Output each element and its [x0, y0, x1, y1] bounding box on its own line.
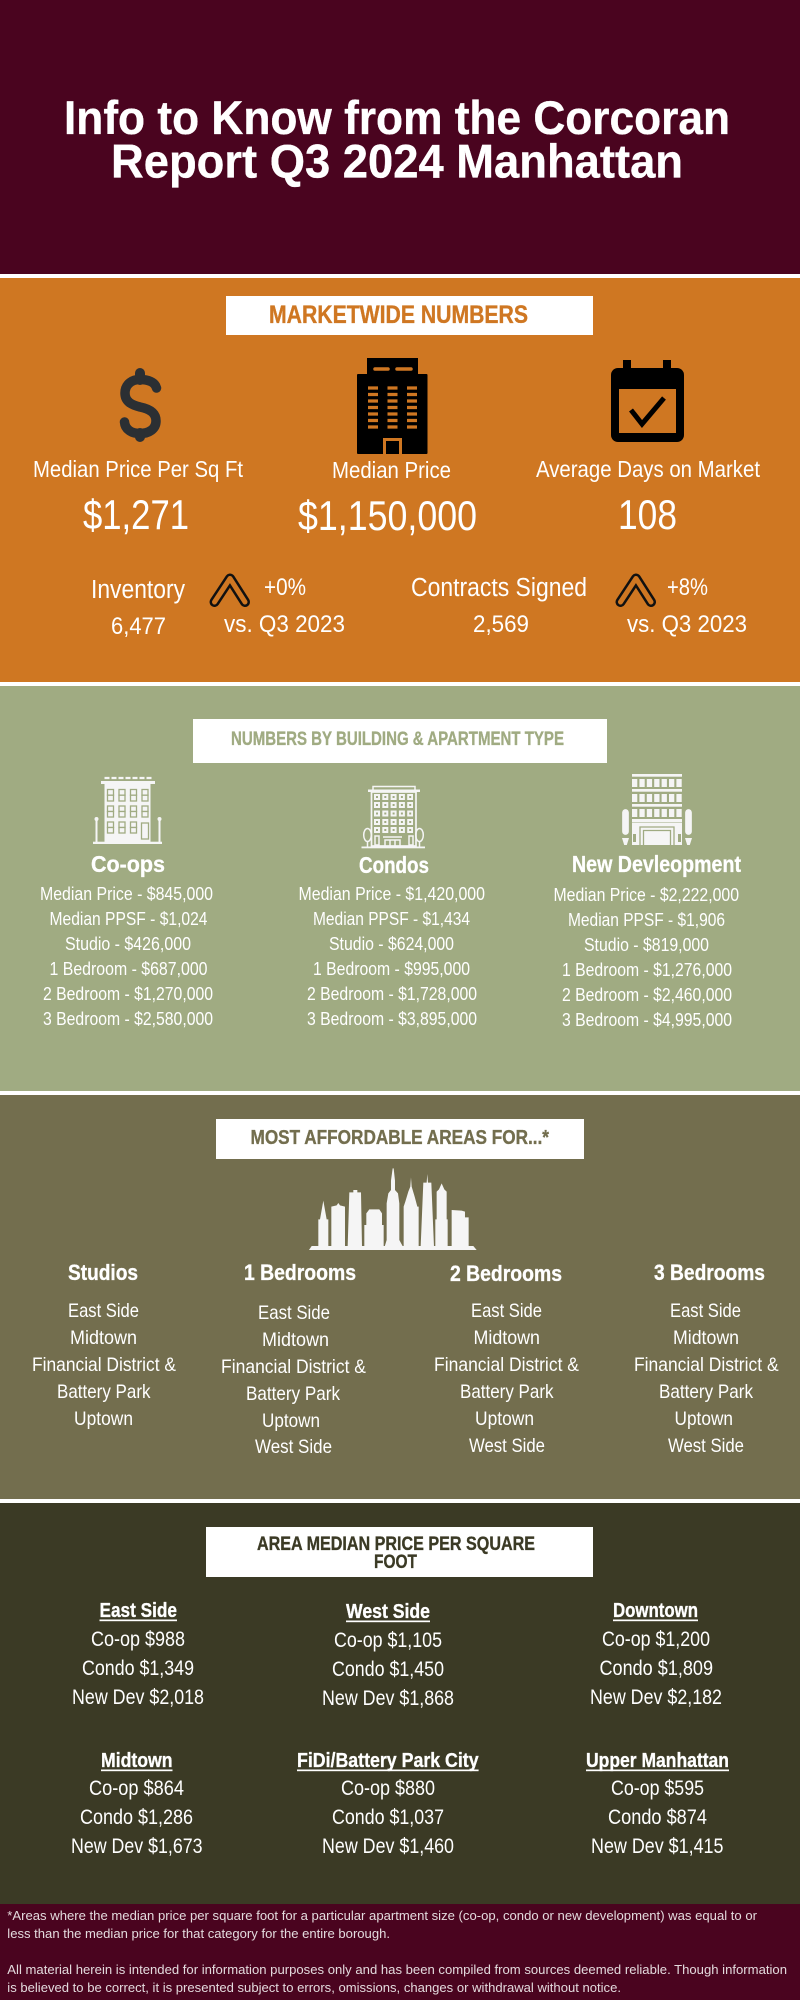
- column: condos: 2 Bedroom - $1,728,000: [307, 984, 477, 1004]
- icon: condo building: [362, 786, 425, 848]
- stat: inventory: 6,477: [111, 613, 166, 640]
- panel: marketwide numbers: [0, 278, 800, 682]
- stat: inventory: Inventory: [91, 576, 185, 604]
- column: condos: Median PPSF - $1,434: [313, 909, 470, 929]
- area: east side: [72, 1599, 204, 1709]
- column: new development: Median PPSF - $1,906: [568, 910, 725, 930]
- column: co-ops: [40, 851, 213, 1029]
- column: 1 bedrooms: Midtown: [262, 1329, 329, 1351]
- column: 3 bedrooms: Midtown: [673, 1327, 739, 1349]
- column: 3 bedrooms: West Side: [668, 1435, 744, 1457]
- area: downtown: [590, 1599, 722, 1709]
- column: 1 bedrooms: West Side: [255, 1436, 332, 1458]
- stat: median price per sq ft: Median Price Per Sq Ft: [33, 456, 244, 482]
- panel: most affordable areas: [0, 1095, 800, 1499]
- area: upper manhattan: Co-op $595: [611, 1777, 704, 1800]
- icon: new development building: [622, 774, 692, 845]
- column: condos: 1 Bedroom - $995,000: [313, 959, 470, 979]
- area: midtown: Condo $1,286: [80, 1806, 193, 1829]
- column: 3 bedrooms: 3 Bedrooms: [654, 1260, 765, 1285]
- area: midtown: [71, 1749, 202, 1858]
- heading: most affordable areas: MOST AFFORDABLE AREAS FOR...*: [250, 1127, 549, 1149]
- column: condos: Median Price - $1,420,000: [298, 884, 485, 904]
- column: 2 bedrooms: West Side: [469, 1435, 545, 1457]
- text: legal disclaimer: is believed to be correct, it is presented subject to errors, omissions, changes or withdrawal without notice.: [7, 1980, 621, 1995]
- area: west side: Condo $1,450: [332, 1658, 444, 1681]
- area: downtown: Condo $1,809: [600, 1657, 713, 1680]
- icon: co-op building: [93, 778, 162, 844]
- title: Report Q3 2024 Manhattan: [111, 134, 683, 188]
- area: west side: Co-op $1,105: [334, 1629, 442, 1652]
- area: east side: East Side: [100, 1599, 177, 1622]
- title: [64, 91, 730, 188]
- column: co-ops: Median PPSF - $1,024: [50, 909, 208, 929]
- column: 2 bedrooms: Battery Park: [460, 1381, 554, 1403]
- column: studios: [32, 1260, 176, 1430]
- text: legal disclaimer: [7, 1962, 787, 1995]
- stat: contracts change: +8%: [667, 574, 708, 601]
- area: midtown: New Dev $1,673: [71, 1835, 202, 1858]
- heading: numbers by building and apartment type: [193, 719, 607, 763]
- column: new development: [554, 851, 741, 1030]
- stat: median price per sq ft: $1,271: [83, 491, 189, 538]
- column: studios: Battery Park: [57, 1381, 151, 1403]
- panel: area median price per square foot: [0, 1503, 800, 1904]
- heading: most affordable areas: [216, 1119, 584, 1159]
- area: upper manhattan: Condo $874: [608, 1806, 707, 1829]
- column: new development: Studio - $819,000: [584, 935, 709, 955]
- stat: average days on market: 108: [618, 491, 677, 538]
- stat: average days on market: Average Days on Market: [536, 456, 761, 482]
- column: studios: Uptown: [74, 1408, 133, 1430]
- column: condos: Condos: [359, 852, 429, 878]
- column: 3 bedrooms: Financial District &: [634, 1354, 779, 1376]
- column: new development: Median Price - $2,222,000: [554, 885, 739, 905]
- area: fidi battery park city: Co-op $880: [341, 1777, 435, 1800]
- stat: median price: $1,150,000: [298, 492, 477, 539]
- area: upper manhattan: Upper Manhattan: [586, 1749, 729, 1772]
- icon: dollar sign: [124, 373, 156, 437]
- stat: inventory change: vs. Q3 2023: [224, 611, 345, 638]
- column: new development: 3 Bedroom - $4,995,000: [562, 1010, 732, 1030]
- text: areas footnote: less than the median price for that category for the entire borough.: [7, 1926, 390, 1941]
- stat: contracts change: vs. Q3 2023: [627, 611, 747, 638]
- column: new development: New Devleopment: [572, 851, 741, 877]
- column: co-ops: Co-ops: [91, 851, 165, 877]
- column: studios: Studios: [68, 1260, 138, 1285]
- column: 1 bedrooms: 1 Bedrooms: [244, 1260, 356, 1285]
- column: co-ops: Studio - $426,000: [65, 934, 191, 954]
- stat: contracts signed: [411, 574, 587, 638]
- area: fidi battery park city: [297, 1749, 479, 1858]
- icon: office building: [357, 358, 428, 456]
- panel: footer notes: [0, 1904, 800, 2000]
- column: 2 bedrooms: Uptown: [475, 1408, 534, 1430]
- stat: contracts signed: 2,569: [473, 611, 529, 638]
- stat: contracts signed: Contracts Signed: [411, 574, 587, 602]
- column: condos: 3 Bedroom - $3,895,000: [307, 1009, 477, 1029]
- panel: title header: [0, 0, 800, 274]
- column: co-ops: 3 Bedroom - $2,580,000: [43, 1009, 213, 1029]
- area: east side: Co-op $988: [91, 1628, 185, 1651]
- column: 1 bedrooms: [221, 1260, 366, 1458]
- stat: inventory change: +0%: [264, 574, 306, 601]
- stat: contracts change: [627, 574, 747, 638]
- column: studios: East Side: [68, 1300, 139, 1322]
- column: 3 bedrooms: East Side: [670, 1300, 741, 1322]
- stat: median price: Median Price: [332, 457, 451, 483]
- column: studios: Financial District &: [32, 1354, 176, 1376]
- area: west side: [322, 1600, 454, 1710]
- icon: city skyline: [309, 1168, 477, 1250]
- heading: area median price per square foot: FOOT: [374, 1551, 417, 1573]
- stat: inventory: [91, 576, 185, 640]
- area: midtown: Co-op $864: [89, 1777, 184, 1800]
- text: areas footnote: *Areas where the median price per square foot for a particular apartment size (co-op, condo or new development) was equal to or: [7, 1908, 758, 1923]
- area: upper manhattan: [586, 1749, 729, 1858]
- column: new development: 2 Bedroom - $2,460,000: [562, 985, 732, 1005]
- text: legal disclaimer: All material herein is intended for information purposes only and has been compiled from sources deemed reliable. Though information: [7, 1962, 787, 1977]
- text: areas footnote: [7, 1908, 758, 1941]
- column: 3 bedrooms: Battery Park: [659, 1381, 753, 1403]
- area: fidi battery park city: New Dev $1,460: [322, 1835, 454, 1858]
- heading: area median price per square foot: [206, 1527, 593, 1577]
- column: 2 bedrooms: Financial District &: [434, 1354, 579, 1376]
- area: east side: Condo $1,349: [82, 1657, 194, 1680]
- area: west side: West Side: [346, 1600, 430, 1623]
- area: downtown: Downtown: [613, 1599, 698, 1622]
- column: 3 bedrooms: Uptown: [674, 1408, 733, 1430]
- heading: marketwide numbers: MARKETWIDE NUMBERS: [269, 302, 528, 329]
- area: downtown: Co-op $1,200: [602, 1628, 710, 1651]
- column: new development: 1 Bedroom - $1,276,000: [562, 960, 732, 980]
- icon: up arrow contracts: [620, 578, 651, 602]
- area: midtown: Midtown: [101, 1749, 172, 1772]
- area: west side: New Dev $1,868: [322, 1687, 454, 1710]
- column: 1 bedrooms: East Side: [258, 1302, 330, 1324]
- title: Info to Know from the Corcoran: [64, 91, 730, 144]
- column: co-ops: 1 Bedroom - $687,000: [50, 959, 208, 979]
- stat: median price: [298, 457, 477, 539]
- column: condos: [298, 852, 485, 1029]
- stat: median price per sq ft: [33, 456, 244, 538]
- column: 2 bedrooms: 2 Bedrooms: [450, 1261, 562, 1286]
- icon: up arrow inventory: [214, 578, 245, 602]
- column: condos: Studio - $624,000: [329, 934, 454, 954]
- column: 1 bedrooms: Battery Park: [246, 1383, 340, 1405]
- area: east side: New Dev $2,018: [72, 1686, 204, 1709]
- heading: numbers by building and apartment type: NUMBERS BY BUILDING & APARTMENT TYPE: [231, 729, 564, 750]
- area: upper manhattan: New Dev $1,415: [591, 1835, 724, 1858]
- icon: calendar with check: [611, 360, 684, 442]
- area: downtown: New Dev $2,182: [590, 1686, 722, 1709]
- panel: numbers by building and apartment type: [0, 686, 800, 1091]
- area: fidi battery park city: FiDi/Battery Park City: [297, 1749, 479, 1772]
- column: 2 bedrooms: East Side: [471, 1300, 542, 1322]
- stat: average days on market: [536, 456, 761, 538]
- column: 1 bedrooms: Uptown: [262, 1410, 320, 1432]
- column: 1 bedrooms: Financial District &: [221, 1356, 366, 1378]
- column: 2 bedrooms: [434, 1261, 579, 1457]
- column: 2 bedrooms: Midtown: [474, 1327, 540, 1349]
- column: 3 bedrooms: [634, 1260, 779, 1457]
- column: studios: Midtown: [70, 1327, 137, 1349]
- column: co-ops: Median Price - $845,000: [40, 884, 213, 904]
- heading: area median price per square foot: AREA MEDIAN PRICE PER SQUARE: [257, 1533, 535, 1555]
- column: co-ops: 2 Bedroom - $1,270,000: [43, 984, 213, 1004]
- area: fidi battery park city: Condo $1,037: [332, 1806, 444, 1829]
- stat: inventory change: [224, 574, 345, 638]
- heading: marketwide numbers: [226, 296, 593, 335]
